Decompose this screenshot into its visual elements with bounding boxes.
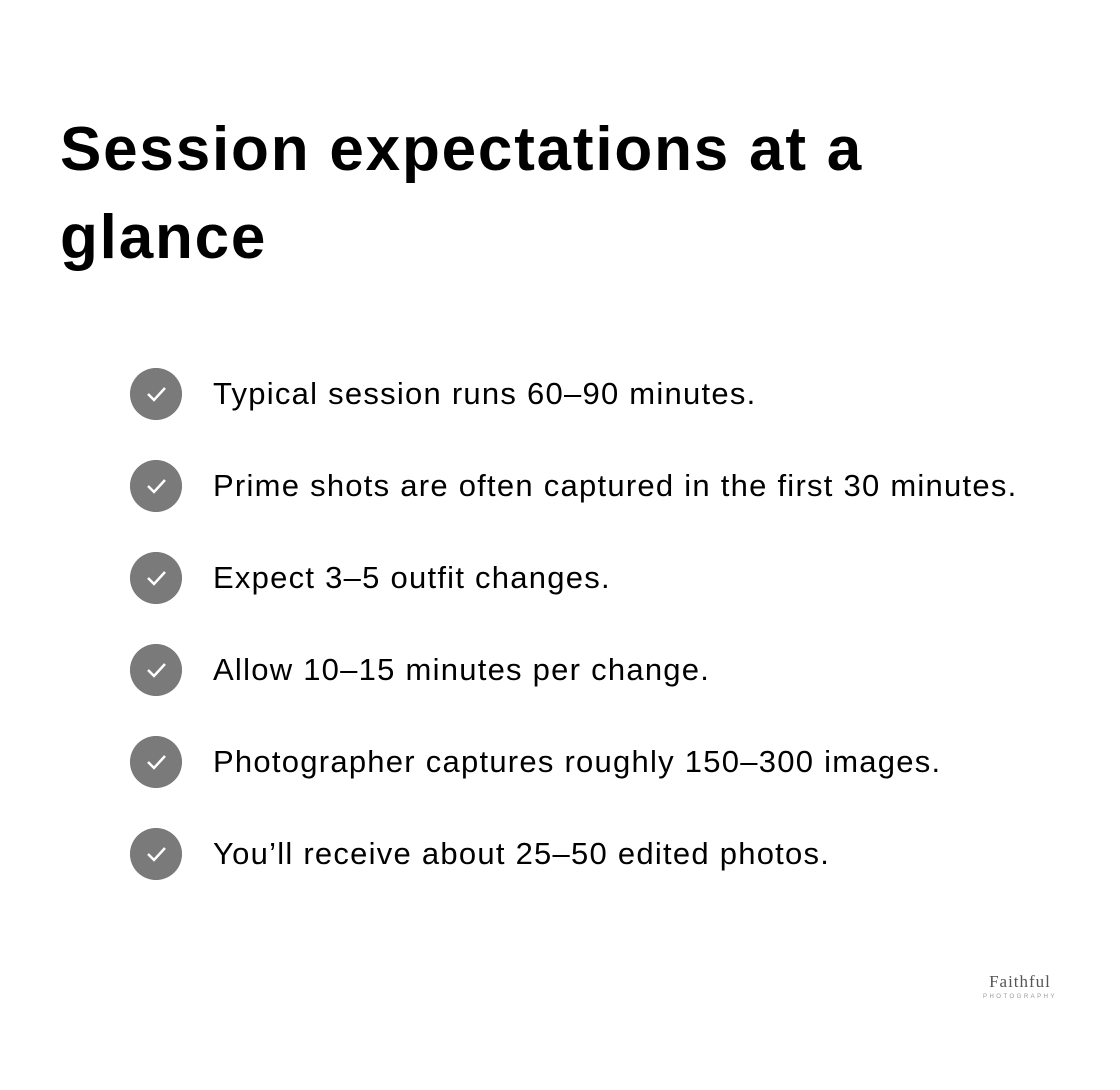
item 6 [130, 828, 830, 880]
item 3 [130, 552, 611, 604]
logo [983, 972, 1057, 1000]
logo: PHOTOGRAPHY [983, 994, 1057, 1000]
title: Session expectations at a [60, 115, 863, 184]
item 5: Photographer captures roughly 150–300 images. [213, 744, 941, 779]
item 2 [130, 460, 1018, 512]
item 2: Prime shots are often captured in the first 30 minutes. [213, 468, 1018, 503]
title: glance [60, 203, 267, 272]
item 4 [130, 644, 710, 696]
title [60, 115, 863, 272]
logo: Faithful [989, 972, 1051, 991]
icon: check [130, 552, 182, 604]
icon: check [130, 736, 182, 788]
item 6: You’ll receive about 25–50 edited photos. [213, 836, 830, 871]
icon: check [130, 368, 182, 420]
icon: check [130, 644, 182, 696]
item 4: Allow 10–15 minutes per change. [213, 652, 710, 687]
item 1: Typical session runs 60–90 minutes. [213, 376, 756, 411]
item 5 [130, 736, 941, 788]
icon: check [130, 460, 182, 512]
icon: check [130, 828, 182, 880]
item 1 [130, 368, 756, 420]
item 3: Expect 3–5 outfit changes. [213, 560, 611, 595]
